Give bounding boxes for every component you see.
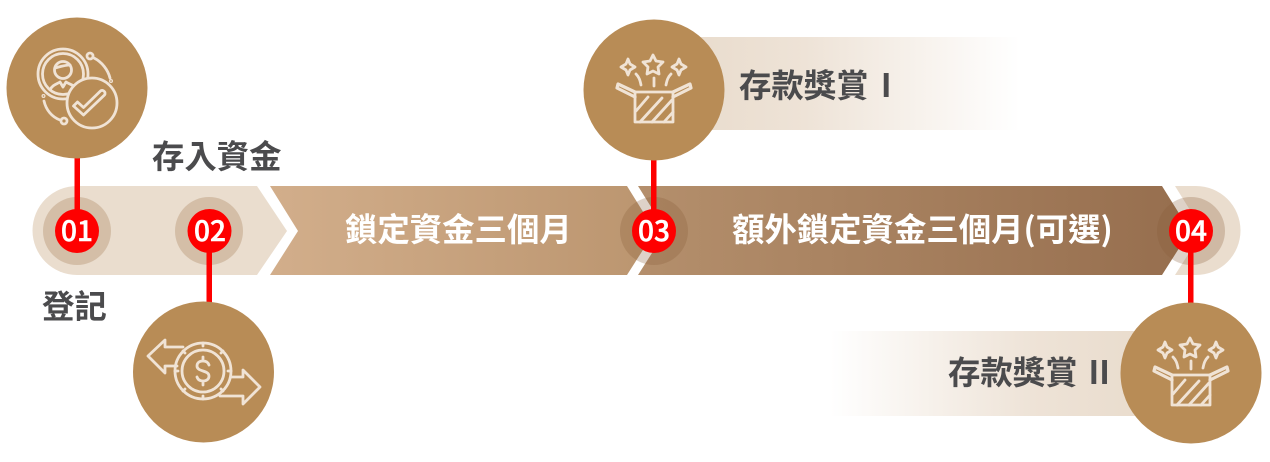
icon: gift box reward II: [1120, 302, 1262, 444]
arrow segment: lock funds three months: [270, 186, 655, 275]
banner: deposit reward I: [690, 37, 1020, 130]
step 02 marker: [175, 197, 243, 311]
heading: deposit reward I: 存款獎賞: [739, 60, 869, 107]
icon: gift box reward I: [584, 20, 724, 160]
arrow segment: extra lock three months: [638, 186, 1190, 275]
step 01 marker: 01: [61, 210, 93, 250]
icon: money exchange: [133, 302, 274, 442]
label: extra lock funds three months optional: 額外鎖定資金三個月(可選): [732, 204, 1113, 251]
step 04 marker: 04: [1175, 210, 1207, 250]
arrow segment: register and deposit: [33, 186, 287, 275]
icon: verified person: [6, 18, 148, 158]
heading: deposit reward II: Ⅱ: [1083, 347, 1115, 394]
label: lock funds three months: 鎖定資金三個月: [345, 204, 572, 251]
heading: deposit funds: 存入資金: [152, 131, 282, 178]
arrow end cap: [1175, 186, 1240, 275]
heading: deposit reward II: 存款獎賞: [948, 347, 1078, 394]
banner: deposit reward II: [830, 331, 1140, 416]
heading: register: 登記: [42, 281, 107, 328]
step 03 marker: [620, 150, 688, 265]
heading: deposit reward I: Ⅰ: [870, 60, 902, 107]
step 04 marker: [1157, 197, 1225, 311]
step 02 marker: 02: [194, 210, 226, 250]
step 01 marker: [43, 150, 111, 265]
step 03 marker: 03: [638, 210, 670, 250]
